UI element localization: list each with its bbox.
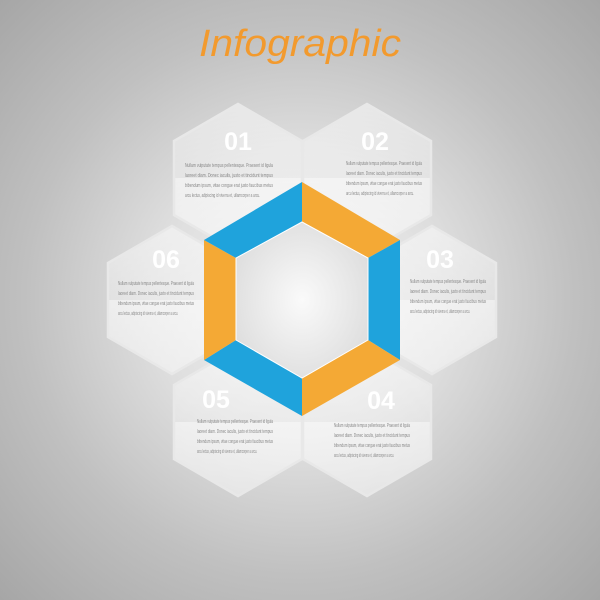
hexagon panel 02: arcu lectus, adipiscing id viverra et, ullamcorper a arcu. (346, 191, 414, 197)
hexagon panel 04: laoreet diam. Donec iaculis, justo et tincidunt tempus (334, 433, 410, 439)
hexagon panel 03: 03 (426, 246, 454, 274)
hexagon panel 02: bibendum ipsum, vitae congue erat justo faucibus metus (346, 181, 422, 187)
hexagon panel 05: Nullam vulputate tempus pellentesque. Praesent id ligula (197, 419, 273, 425)
hexagon panel 02: laoreet diam. Donec iaculis, justo et tincidunt tempus (346, 171, 422, 177)
hexagon panel 05: laoreet diam. Donec iaculis, justo et tincidunt tempus (197, 429, 273, 435)
central hexagon ring (204, 182, 400, 416)
hexagon panel 01: arcu lectus, adipiscing id viverra et, ullamcorper a arcu. (185, 193, 260, 199)
hexagon panel 02 (303, 104, 431, 252)
hexagon panel 05: 05 (202, 386, 230, 414)
hexagon panel 02: 02 (361, 128, 389, 156)
hexagon panel 01: Nullam vulputate tempus pellentesque. Praesent id ligula (185, 163, 273, 169)
hexagon panel 04: Nullam vulputate tempus pellentesque. Praesent id ligula (334, 423, 410, 429)
hexagon panel 06: laoreet diam. Donec iaculis, justo et tincidunt tempus (118, 291, 194, 297)
hexagon panel 06: bibendum ipsum, vitae congue erat justo faucibus metus (118, 301, 194, 307)
hexagon panel 04: arcu lectus, adipiscing id viverra et, ullamcorper a arcu. (334, 453, 394, 459)
hexagon panel 03: arcu lectus, adipiscing id viverra et, ullamcorper a arcu. (410, 309, 470, 315)
hexagon panel 03 (368, 226, 496, 374)
title: Infographic (199, 23, 401, 65)
hexagon panel 06: Nullam vulputate tempus pellentesque. Praesent id ligula (118, 281, 194, 287)
hexagon panel 05 (174, 348, 302, 496)
hexagon panel 04 (303, 348, 431, 496)
hexagon panel 06: 06 (152, 246, 180, 274)
hexagon panel 05: arcu lectus, adipiscing id viverra et, ullamcorper a arcu. (197, 449, 257, 455)
hexagon panel 03: Nullam vulputate tempus pellentesque. Praesent id ligula (410, 279, 486, 285)
hexagon panel 01: 01 (224, 128, 252, 156)
hexagon panel 05: bibendum ipsum, vitae congue erat justo faucibus metus (197, 439, 273, 445)
hexagon panel 03: bibendum ipsum, vitae congue erat justo faucibus metus (410, 299, 486, 305)
hexagon panel 06 (108, 226, 236, 374)
hexagon panel 02: Nullam vulputate tempus pellentesque. Praesent id ligula (346, 161, 422, 167)
hexagon panel 01 (174, 104, 302, 252)
hexagon panel 01: bibendum ipsum, vitae congue erat justo faucibus metus (185, 183, 273, 189)
hexagon panel 04: 04 (367, 387, 395, 415)
hexagon panel 03: laoreet diam. Donec iaculis, justo et tincidunt tempus (410, 289, 486, 295)
hexagon panel 04: bibendum ipsum, vitae congue erat justo faucibus metus (334, 443, 410, 449)
central hexagon (236, 222, 368, 378)
hexagon panel 06: arcu lectus, adipiscing id viverra et, ullamcorper a arcu. (118, 311, 178, 317)
hexagon panel 01: laoreet diam. Donec iaculis, justo et tincidunt tempus (185, 173, 273, 179)
